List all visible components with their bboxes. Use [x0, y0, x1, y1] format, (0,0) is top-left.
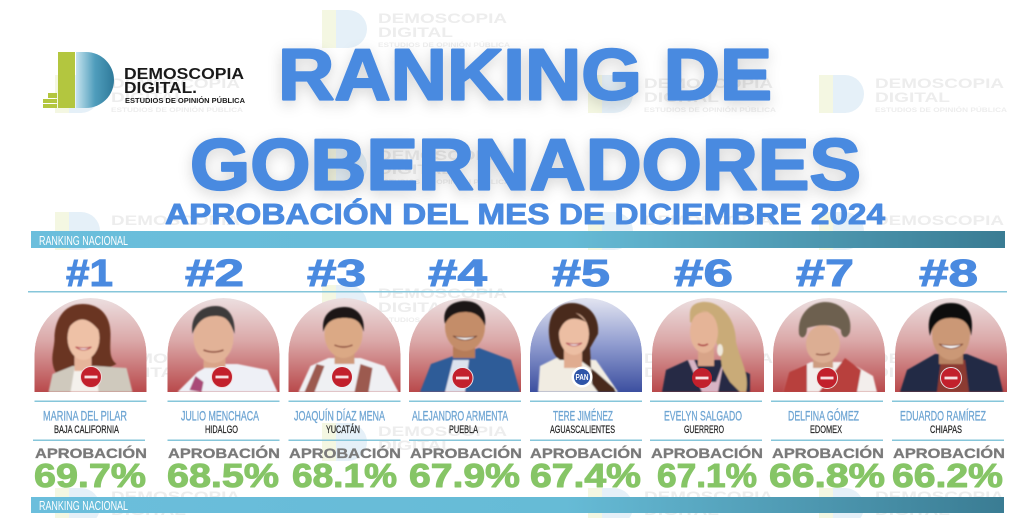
- watermarks: DIGITAL: [875, 502, 951, 518]
- watermarks: DIGITAL: [644, 89, 720, 105]
- top banner: ranking nacional: RANKING NACIONAL: [39, 233, 128, 248]
- title: [190, 36, 861, 206]
- approval value: 67.4%: [530, 457, 641, 494]
- logo: Demoscopia Digital: [43, 52, 245, 108]
- watermarks: DEMOSCOPIA: [875, 350, 1004, 366]
- title: GOBERNADORES: [190, 126, 861, 206]
- state: CHIAPAS: [930, 424, 962, 436]
- subtitle: APROBACIÓN DEL MES DE DICIEMBRE 2024: [165, 197, 885, 231]
- rank numbers row: [66, 253, 978, 295]
- watermarks: DIGITAL: [111, 89, 187, 105]
- watermarks: DEMOSCOPIA: [378, 10, 507, 26]
- watermarks: ESTUDIOS DE OPINIÓN PÚBLICA: [875, 105, 1007, 114]
- approval value: 66.2%: [892, 457, 1003, 494]
- watermarks: DEMOSCOPIA: [644, 212, 773, 228]
- name: MARINA DEL PILAR: [43, 408, 127, 424]
- name: JOAQUÍN DÍAZ MENA: [294, 408, 385, 424]
- approval value: 66.8%: [769, 457, 885, 494]
- state: PUEBLA: [449, 424, 478, 436]
- logo wordmark: [124, 66, 245, 105]
- watermarks: ESTUDIOS DE OPINIÓN PÚBLICA: [378, 40, 510, 49]
- logo wordmark: DEMOSCOPIA: [124, 66, 244, 83]
- portrait: Marina del Pilar: [34, 298, 146, 392]
- approval label: APROBACIÓN: [772, 444, 884, 461]
- watermarks: DEMOSCOPIA: [644, 350, 773, 366]
- bottom banner: ranking nacional: RANKING NACIONAL: [39, 498, 128, 513]
- watermarks: DEMOSCOPIA: [111, 488, 240, 504]
- watermarks: DIGITAL: [875, 364, 951, 380]
- name: DELFINA GÓMEZ: [788, 408, 859, 424]
- rank numbers row: #3: [307, 253, 366, 295]
- state: EDOMEX: [810, 424, 842, 436]
- panel: Julio Menchaca: [167, 298, 280, 494]
- watermarks: DIGITAL: [644, 364, 720, 380]
- watermarks: DEMOSCOPIA: [875, 75, 1004, 91]
- watermarks: ESTUDIOS DE OPINIÓN PÚBLICA: [378, 177, 510, 186]
- rank numbers row: #8: [919, 253, 978, 295]
- bottom banner: ranking nacional: [31, 497, 1004, 513]
- panel: Marina del Pilar: [33, 298, 147, 494]
- approval value: 67.9%: [409, 457, 520, 494]
- approval label: APROBACIÓN: [410, 444, 522, 461]
- badge: Morena: [452, 368, 473, 388]
- portrait: Julio Menchaca: [168, 298, 280, 392]
- title: RANKING DE: [278, 36, 772, 116]
- badge: Morena: [212, 366, 232, 388]
- logo wordmark: ESTUDIOS DE OPINIÓN PÚBLICA: [125, 96, 245, 105]
- badge: Morena: [692, 368, 712, 388]
- approval value: 67.1%: [657, 457, 757, 494]
- rank numbers row: #6: [674, 253, 733, 295]
- approval label: APROBACIÓN: [893, 444, 1005, 461]
- approval label: APROBACIÓN: [289, 444, 401, 461]
- approval label: APROBACIÓN: [651, 444, 763, 461]
- watermarks: DEMOSCOPIA: [378, 285, 507, 301]
- state: GUERRERO: [684, 424, 724, 436]
- approval label: APROBACIÓN: [168, 444, 280, 461]
- watermarks: DIGITAL: [644, 502, 720, 518]
- watermarks: DIGITAL: [111, 364, 187, 380]
- name: ALEJANDRO ARMENTA: [412, 408, 508, 424]
- badge: Morena: [80, 366, 102, 388]
- watermarks: DIGITAL: [378, 24, 454, 40]
- watermarks: DIGITAL: [378, 299, 454, 315]
- approval label: APROBACIÓN: [530, 444, 642, 461]
- watermarks: DEMOSCOPIA: [644, 75, 773, 91]
- name: JULIO MENCHACA: [181, 408, 259, 424]
- watermarks: DEMOSCOPIA: [111, 212, 240, 228]
- portrait: Tere Jiménez: [530, 298, 642, 392]
- watermarks: DEMOSCOPIA: [875, 488, 1004, 504]
- state: AGUASCALIENTES: [550, 424, 615, 436]
- watermarks: DEMOSCOPIA: [378, 147, 507, 163]
- portrait: Joaquín Díaz Mena: [288, 298, 400, 392]
- watermarks: ESTUDIOS DE OPINIÓN PÚBLICA: [378, 315, 510, 324]
- watermarks: DEMOSCOPIA: [111, 75, 240, 91]
- watermarks: DIGITAL: [378, 437, 454, 453]
- watermarks: DIGITAL: [378, 161, 454, 177]
- approval value: 68.1%: [292, 457, 397, 494]
- portrait: Eduardo Ramírez: [895, 298, 1007, 392]
- name: TERE JIMÉNEZ: [553, 408, 613, 424]
- watermarks: DIGITAL: [875, 89, 951, 105]
- approval label: APROBACIÓN: [35, 444, 147, 461]
- rank numbers row: #1: [66, 253, 113, 295]
- portrait: Delfina Gómez: [773, 298, 885, 392]
- portrait: Alejandro Armenta: [409, 298, 521, 392]
- watermarks: DEMOSCOPIA: [111, 350, 240, 366]
- badge: Morena: [940, 368, 962, 388]
- panel: Delfina Gómez: [769, 298, 885, 494]
- name: EVELYN SALGADO: [664, 408, 742, 424]
- top banner: ranking nacional: [31, 231, 1005, 248]
- portrait: Evelyn Salgado: [652, 298, 764, 392]
- rank numbers row: #4: [428, 253, 487, 295]
- panel: Eduardo Ramírez: [892, 298, 1007, 494]
- state: BAJA CALIFORNIA: [54, 424, 119, 436]
- panel: Joaquín Díaz Mena: [288, 298, 401, 494]
- rank numbers row: #5: [552, 253, 610, 295]
- watermarks: ESTUDIOS DE OPINIÓN PÚBLICA: [644, 105, 776, 114]
- badge: PAN: PAN: [576, 373, 589, 382]
- rank numbers row: #2: [185, 253, 244, 295]
- approval value: 69.7%: [34, 457, 146, 494]
- watermarks: DEMOSCOPIA: [378, 423, 507, 439]
- panel: Alejandro Armenta: [409, 298, 522, 494]
- state: HIDALGO: [205, 424, 238, 436]
- badge: Morena: [816, 368, 838, 388]
- watermarks: DEMOSCOPIA: [644, 488, 773, 504]
- state: YUCATÁN: [326, 423, 360, 436]
- icon: logo D mark: [43, 52, 114, 108]
- badge: Morena: [332, 367, 352, 387]
- approval value: 68.5%: [167, 457, 279, 494]
- watermarks: DEMOSCOPIA: [875, 212, 1004, 228]
- panel: Tere Jiménez: [530, 298, 642, 494]
- panel: Evelyn Salgado: [650, 298, 764, 494]
- watermarks: ESTUDIOS DE OPINIÓN PÚBLICA: [111, 105, 243, 114]
- logo wordmark: DIGITAL.: [124, 80, 197, 97]
- rank numbers row: #7: [796, 253, 854, 295]
- watermarks: DIGITAL: [111, 502, 187, 518]
